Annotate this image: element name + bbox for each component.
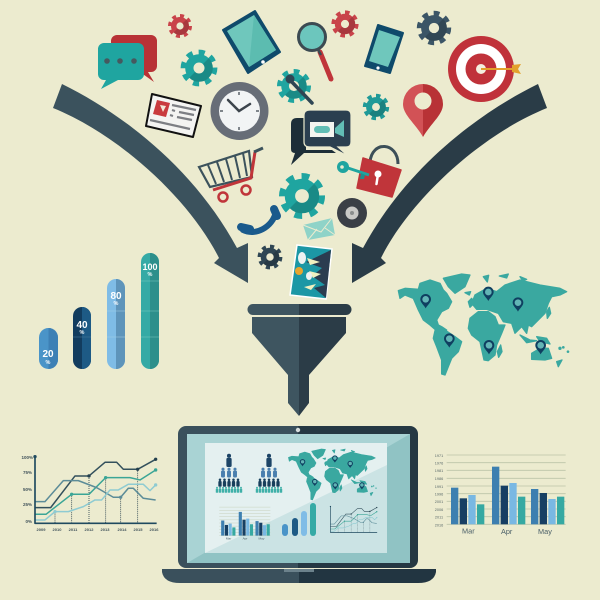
pill 20 percent: %	[46, 360, 51, 366]
x axis labels	[37, 527, 159, 532]
icon: clock	[210, 82, 268, 140]
x axis labels: 2014	[118, 527, 127, 532]
y axis labels: 25%	[23, 502, 32, 507]
y axis labels: 100%	[21, 455, 33, 460]
icon: shopping cart	[199, 148, 263, 202]
icon: teal gear	[183, 52, 215, 84]
pill chart	[39, 253, 159, 369]
arrow: left curved	[53, 84, 248, 283]
pill 40 percent	[73, 307, 91, 369]
year labels: 1971	[435, 454, 443, 458]
icon: target with arrow	[448, 36, 521, 102]
pill 20 percent: 20	[42, 349, 54, 360]
people pyramid left	[216, 454, 242, 493]
x axis labels: 2015	[134, 527, 143, 532]
people pyramid right	[256, 454, 282, 493]
year labels: 1986	[435, 477, 443, 481]
funnel	[248, 304, 352, 416]
icon: disc	[337, 198, 367, 228]
year labels: 1996	[435, 492, 443, 496]
bar chart	[435, 454, 566, 536]
x axis labels: 2016	[150, 527, 159, 532]
icon: video chat bubbles	[291, 110, 351, 165]
pill 100 percent: 100	[142, 262, 158, 272]
arrow: right curved	[352, 84, 547, 283]
icon: large teal gear	[282, 176, 322, 216]
icon: gear with wrench	[280, 72, 312, 103]
year labels	[435, 454, 443, 528]
pill 80 percent	[107, 279, 125, 369]
x axis labels: 2011	[69, 527, 78, 532]
icon: chat bubbles	[98, 35, 157, 89]
year labels: 1991	[435, 485, 443, 489]
icon: picture card	[290, 245, 332, 299]
icon: dark gear	[419, 13, 449, 43]
icon: tablet	[223, 11, 280, 73]
pill 20 percent	[39, 328, 58, 369]
pill 40 percent: 40	[76, 320, 88, 331]
x axis labels: 2010	[53, 527, 62, 532]
line chart	[21, 455, 159, 532]
x axis labels: 2009	[37, 527, 46, 532]
laptop base	[162, 569, 436, 583]
icon: magnifier	[298, 24, 331, 79]
pill 80 percent: 80	[110, 291, 122, 302]
world map with pins	[398, 274, 569, 375]
mini world map	[288, 449, 376, 500]
mini bar chart	[219, 507, 270, 541]
mini line chart	[330, 506, 377, 532]
icon: red gear	[170, 16, 190, 36]
icon: small teal gear	[365, 96, 387, 118]
icon: id card	[146, 94, 201, 137]
pill 40 percent: %	[80, 330, 85, 336]
icon: padlock and key	[337, 146, 401, 197]
y axis labels: 50%	[23, 487, 32, 492]
x axis labels: 2013	[101, 527, 110, 532]
icon: smartphone	[365, 25, 403, 73]
year labels: 1981	[435, 469, 443, 473]
x axis labels: 2012	[85, 527, 94, 532]
year labels: 2006	[435, 508, 443, 512]
pill 80 percent: %	[114, 301, 119, 307]
pill 100 percent: %	[148, 272, 153, 278]
y axis labels: 75%	[23, 470, 32, 475]
pill 100 percent	[141, 253, 159, 369]
mini pill chart	[282, 503, 316, 536]
icon: telephone handset	[241, 209, 277, 232]
laptop screen	[187, 434, 410, 563]
year labels: 1976	[435, 462, 443, 466]
icon: location pin red	[403, 84, 443, 137]
laptop	[162, 426, 436, 583]
year labels: 2001	[435, 500, 443, 504]
icon: small dark gear	[259, 246, 281, 268]
y axis labels	[21, 455, 33, 524]
year labels: 2016	[435, 524, 443, 528]
icon: envelope	[303, 218, 335, 240]
icon: red gear right	[333, 12, 357, 36]
year labels: 2011	[435, 516, 443, 520]
y axis labels: 0%	[25, 519, 32, 524]
laptop body	[178, 426, 418, 568]
